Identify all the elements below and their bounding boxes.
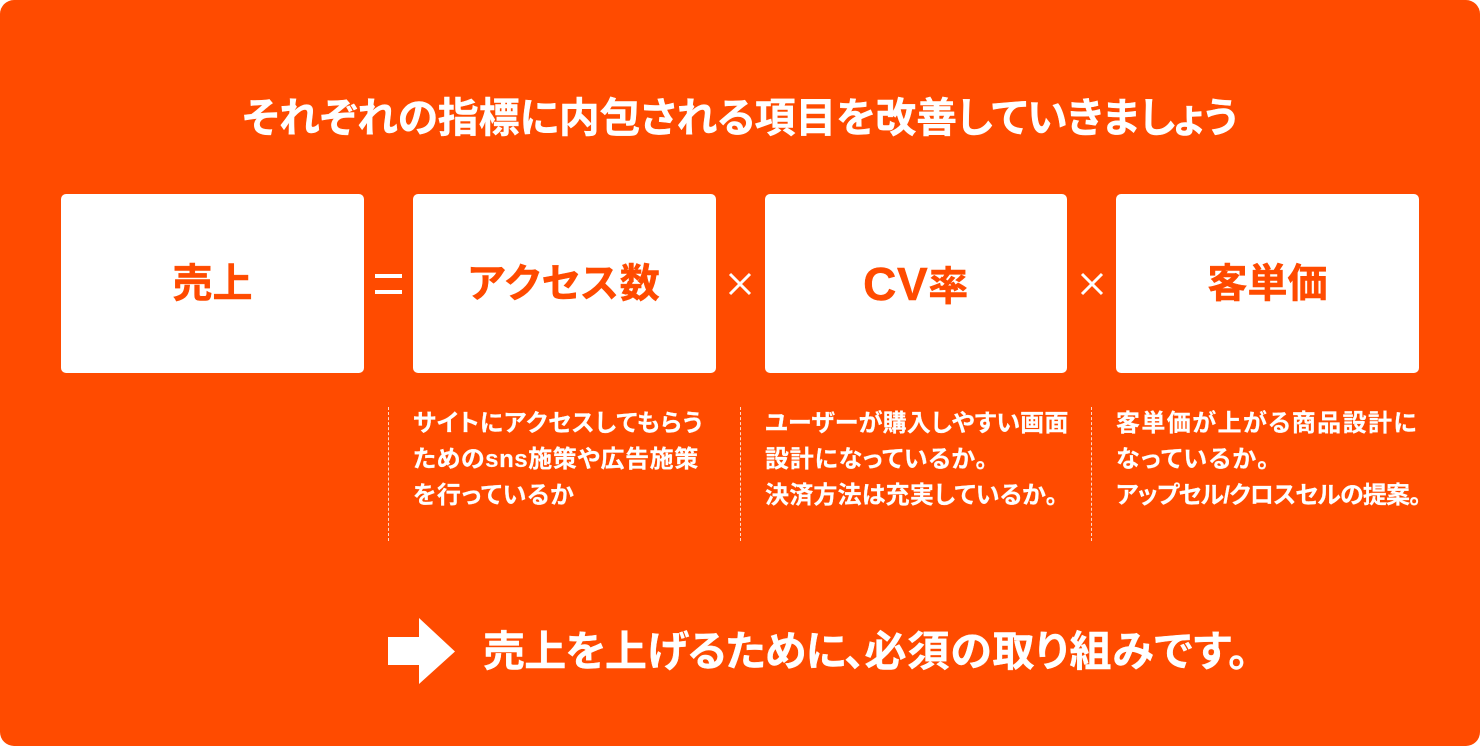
box: conversion rate xyxy=(765,194,1067,373)
text: access description: を行っているか xyxy=(413,482,575,509)
divider: cv xyxy=(740,407,741,541)
text: order value description: 客単価が上がる商品設計に xyxy=(1116,410,1418,437)
text: cv description: 設計になっているか。 xyxy=(765,446,988,473)
operator: multiply 2 xyxy=(1081,273,1103,295)
box: sales xyxy=(61,194,364,373)
text: cv description: 決済方法は充実しているか。 xyxy=(765,482,1058,509)
text: access description: サイトにアクセスしてもらう xyxy=(413,410,703,437)
text: order value description: なっているか。 xyxy=(1116,446,1270,473)
box: average order value: 客単価 xyxy=(1208,262,1328,306)
box: conversion rate: CV率 xyxy=(863,258,969,310)
title: それぞれの指標に内包される項目を改善していきましょう xyxy=(242,95,1238,141)
box: sales: 売上 xyxy=(172,262,252,306)
text: access description xyxy=(413,410,703,509)
divider: access xyxy=(388,407,389,541)
divider: order value xyxy=(1091,407,1092,541)
box: average order value xyxy=(1116,194,1419,373)
box: access count: アクセス数 xyxy=(468,262,661,306)
text: cv description: ユーザーが購入しやすい画面 xyxy=(765,410,1068,437)
text: access description: ためのsns施策や広告施策 xyxy=(413,446,699,473)
conclusion text: 売上を上げるために、必須の取り組みです。 xyxy=(483,628,1250,675)
text: cv description xyxy=(765,410,1068,509)
operator: multiply 1 xyxy=(729,273,751,295)
text: order value description xyxy=(1116,410,1420,509)
text: order value description: アップセル/クロスセルの提案。 xyxy=(1116,482,1420,509)
operator: equals xyxy=(375,274,402,294)
icon: arrow xyxy=(388,618,455,684)
box: access count xyxy=(413,194,716,373)
